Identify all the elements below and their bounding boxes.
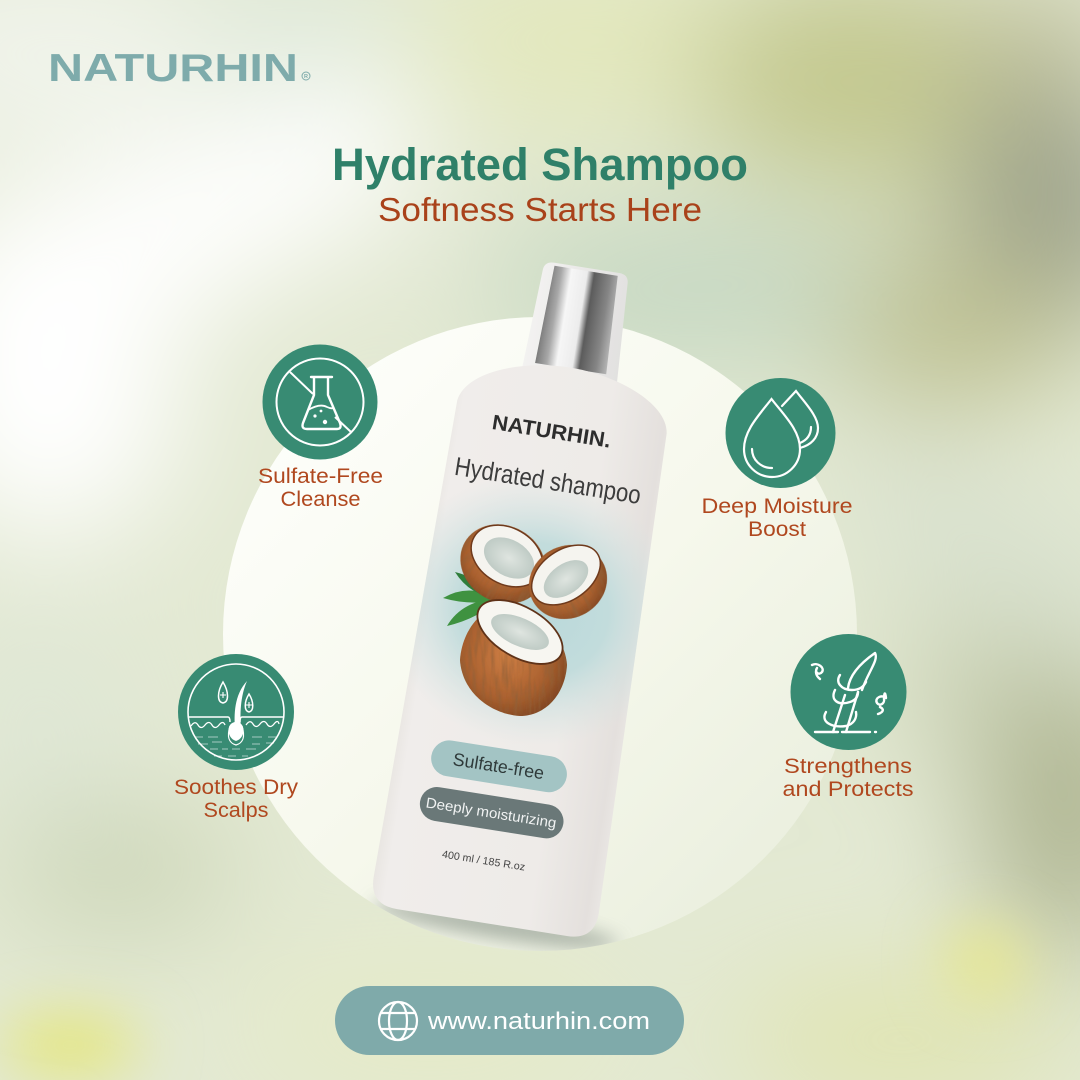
feature: sulfate-free cleanse — [258, 344, 383, 511]
coconut half: top right — [515, 531, 621, 633]
label — [702, 495, 852, 541]
pill: sulfate-free — [429, 738, 570, 795]
subtitle: Softness Starts Here — [378, 191, 702, 228]
bottle body — [369, 350, 682, 940]
logo: R — [304, 74, 308, 80]
website pill — [335, 986, 684, 1055]
product name on bottle: Hydrated shampoo — [453, 451, 643, 510]
title: Hydrated Shampoo — [332, 139, 748, 190]
label — [258, 465, 383, 511]
leaves — [443, 572, 500, 626]
label: Boost — [748, 518, 806, 541]
label: Scalps — [204, 799, 268, 822]
icon: globe — [379, 1002, 417, 1040]
coconut half: top left — [446, 509, 560, 619]
feature: deep moisture boost — [702, 378, 852, 541]
label: Cleanse — [280, 488, 360, 511]
label — [174, 776, 299, 822]
pill: deeply moisturizing: Deeply moisturizing — [425, 795, 557, 832]
feature: soothes dry scalps — [174, 654, 299, 822]
icon: hair strands — [790, 634, 906, 750]
icon: scalp and hair follicle — [178, 654, 294, 770]
volume text: 400 ml / 185 R.oz — [441, 849, 526, 874]
icon: no sulfate flask — [262, 344, 378, 460]
label: Soothes Dry — [174, 776, 299, 799]
label: Strengthens — [784, 755, 912, 778]
brand on bottle: NATURHIN. — [490, 411, 613, 453]
coconut illustration — [443, 509, 621, 716]
label: and Protects — [782, 778, 914, 801]
label background — [414, 494, 647, 728]
coconut whole bottom — [460, 587, 573, 716]
shampoo bottle — [373, 262, 666, 937]
label — [782, 755, 914, 801]
website url: www.naturhin.com — [427, 1008, 650, 1035]
logo: NATURHIN — [48, 47, 298, 90]
icon: water drops — [726, 378, 836, 488]
pill: deeply moisturizing — [417, 785, 566, 841]
bottle cap — [522, 260, 634, 383]
label: Sulfate-Free — [258, 465, 383, 488]
feature: strengthens and protects — [782, 634, 914, 801]
label: Deep Moisture — [702, 495, 852, 518]
background disc — [223, 317, 857, 957]
pill: sulfate-free: Sulfate-free — [452, 749, 546, 783]
